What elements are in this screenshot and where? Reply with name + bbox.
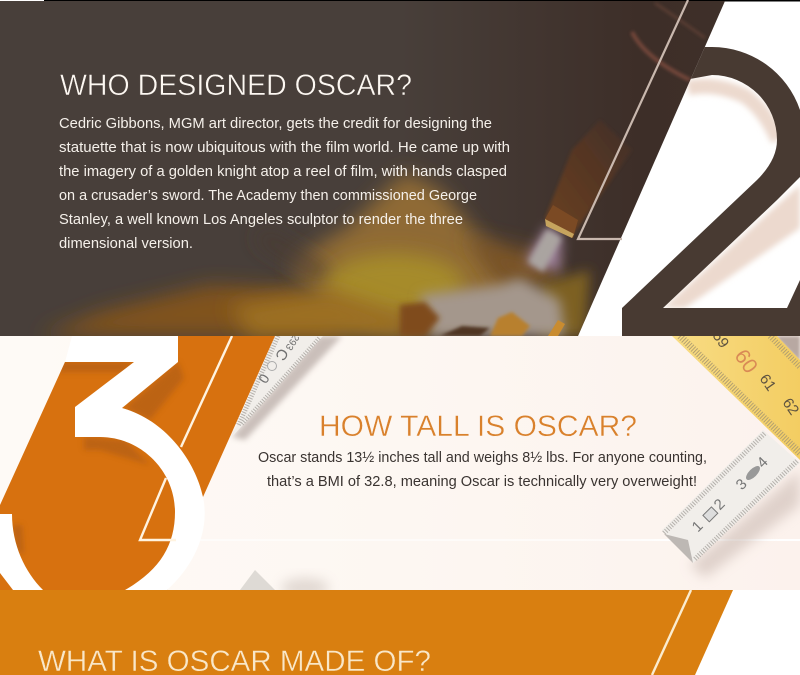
panel: who designed Oscar bbox=[0, 0, 800, 336]
ruler: white folding: 3 bbox=[733, 476, 751, 494]
body text: Stanley, a well known Los Angeles sculptor to render the three bbox=[59, 212, 463, 228]
ruler: yellow tape: 59 bbox=[709, 328, 732, 351]
number 2 bbox=[622, 47, 800, 336]
ruler: yellow tape: 60 bbox=[730, 345, 762, 378]
white slanted line bbox=[181, 336, 232, 447]
body text bbox=[59, 116, 510, 252]
ruler: white top bbox=[232, 332, 342, 440]
ruler: yellow tape bbox=[672, 328, 800, 460]
ruler: white folding: 1 bbox=[689, 518, 707, 536]
ruler: white top: 293 bbox=[283, 332, 301, 352]
photo background: welding torch bbox=[0, 1, 800, 336]
body text: on a crusader’s sword. The Academy then commissioned George bbox=[59, 188, 477, 204]
body text: the imagery of a golden knight atop a reel of film, with hands clasped bbox=[59, 164, 507, 180]
ruler: yellow tape: 61 bbox=[756, 371, 779, 394]
number 3 bbox=[0, 336, 205, 590]
orange slanted block bbox=[0, 336, 275, 590]
panel: how tall is Oscar bbox=[0, 328, 800, 598]
heading: HOW TALL IS OSCAR? bbox=[319, 410, 637, 443]
ruler: white folding bbox=[662, 430, 800, 578]
pale outline line bbox=[578, 0, 688, 239]
body text: dimensional version. bbox=[59, 236, 193, 252]
ruler: white folding: 4 bbox=[754, 454, 772, 472]
body text: statuette that is now ubiquitous with the film world. He came up with bbox=[59, 140, 510, 156]
ruler: bottom tip bbox=[240, 570, 330, 590]
body text: Oscar stands 13½ inches tall and weighs 8½ lbs. For anyone counting, bbox=[258, 450, 707, 466]
body text: that’s a BMI of 32.8, meaning Oscar is technically very overweight! bbox=[267, 474, 697, 490]
heading: WHO DESIGNED OSCAR? bbox=[60, 69, 412, 102]
shadows on orange bbox=[12, 362, 184, 555]
body text: Cedric Gibbons, MGM art director, gets the credit for designing the bbox=[59, 116, 492, 132]
ruler: white folding: 2 bbox=[711, 496, 729, 514]
ruler: white top: 0 bbox=[255, 371, 273, 386]
body text bbox=[258, 450, 707, 490]
ruler: white top: C bbox=[271, 345, 292, 364]
panel: what is Oscar made of bbox=[0, 590, 800, 675]
